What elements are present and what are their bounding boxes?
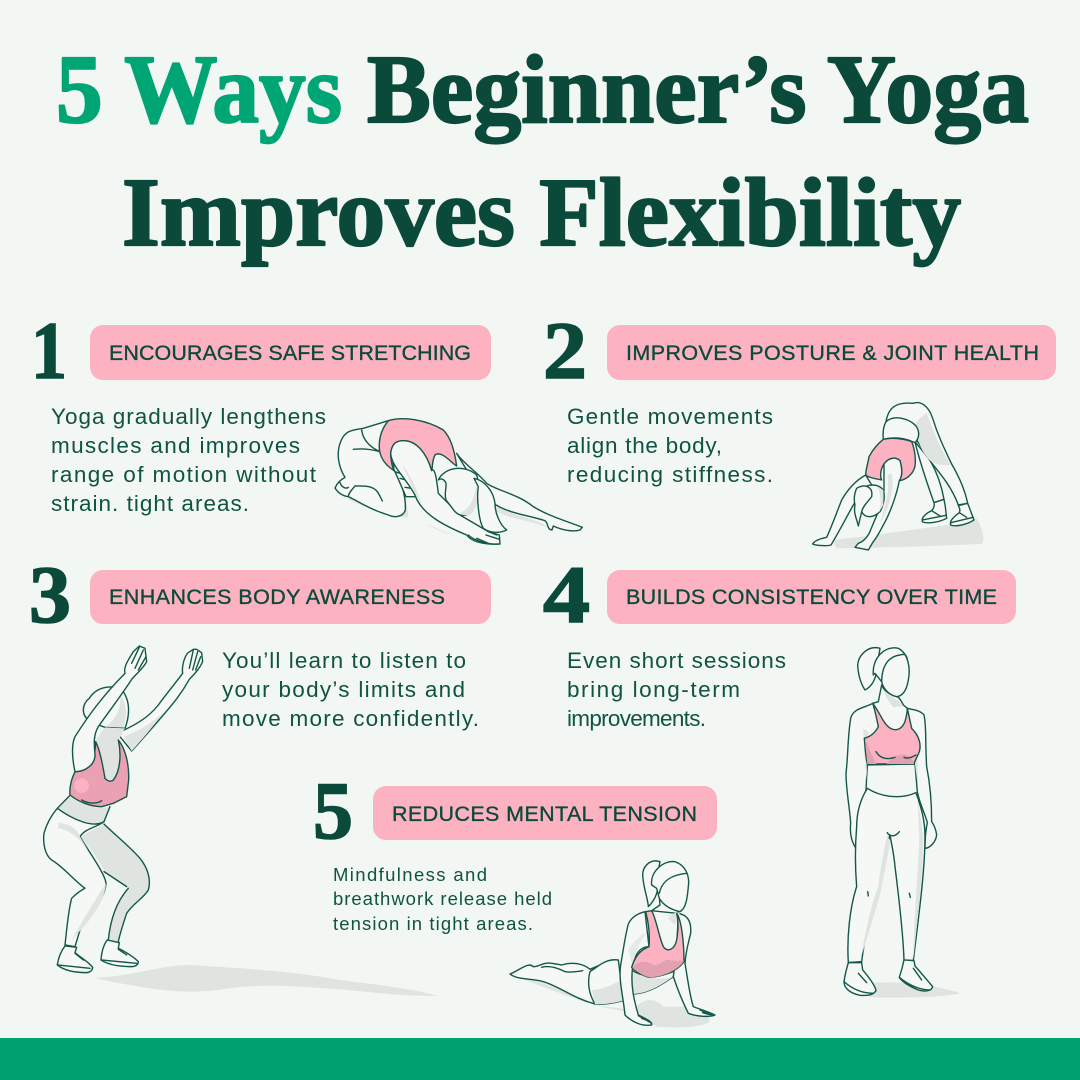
- footer bar: [0, 1038, 1080, 1080]
- text block 5: [333, 864, 552, 934]
- panel: 5 reduces mental tension: [313, 765, 717, 1028]
- text block 3: [222, 648, 479, 731]
- text block 5: tension in tight areas.: [333, 913, 533, 934]
- near arm: [855, 458, 902, 550]
- heading pill 5: [373, 786, 717, 840]
- heading pill 1: [90, 325, 491, 380]
- ponytail: [643, 861, 660, 907]
- text block 3: your body’s limits and: [222, 677, 465, 702]
- text block 3: move more confidently.: [222, 706, 479, 731]
- far arm: [117, 649, 203, 751]
- number 4: 4: [543, 549, 590, 640]
- title: Beginner’s Yoga: [367, 36, 1029, 144]
- hips: [589, 960, 633, 1004]
- text block 2: align the body,: [567, 433, 722, 458]
- head: [83, 687, 129, 728]
- torso and arms: [846, 685, 937, 854]
- title: 5 Ways: [56, 36, 342, 144]
- text block 4: bring long-term: [567, 677, 740, 702]
- waistband: [883, 418, 919, 443]
- hair: [854, 486, 872, 526]
- heading pill 3: ENHANCES BODY AWARENESS: [109, 585, 445, 609]
- number 1: 1: [31, 305, 67, 396]
- text block 2: [567, 404, 773, 487]
- pink top: [70, 740, 129, 807]
- text block 2: Gentle movements: [567, 404, 773, 429]
- belly: [629, 967, 682, 994]
- far leg: [80, 824, 149, 942]
- back: [96, 727, 125, 780]
- ground shadow: [95, 965, 437, 996]
- panel: 4 builds consistency over time: [543, 549, 1016, 998]
- ponytail: [858, 648, 880, 690]
- near arm: [72, 646, 147, 772]
- far arm: [813, 475, 872, 546]
- head: [873, 648, 909, 697]
- illustration: child's pose: [335, 419, 582, 544]
- text block 1: muscles and improves: [51, 433, 300, 458]
- text block 1: Yoga gradually lengthens: [51, 404, 326, 429]
- pink top: [866, 438, 915, 481]
- hips and legs: [335, 421, 405, 517]
- text block 1: [51, 404, 326, 516]
- title: Improves Flexibility: [122, 159, 961, 267]
- shoes: [922, 499, 947, 523]
- heading pill 2: [607, 325, 1056, 380]
- text block 4: [567, 648, 786, 731]
- head: [652, 862, 689, 912]
- pink top: [864, 703, 920, 764]
- text block 4: improvements.: [567, 706, 706, 731]
- far arm: [673, 913, 715, 1016]
- text block 1: strain. tight areas.: [51, 491, 249, 516]
- head: [860, 485, 884, 517]
- heading pill 3: [90, 570, 491, 624]
- illustration: downward dog: [813, 403, 983, 550]
- hair: [474, 478, 507, 532]
- heading pill 2: IMPROVES POSTURE & JOINT HEALTH: [626, 341, 1039, 365]
- shoes: [844, 963, 876, 995]
- heading pill 5: REDUCES MENTAL TENSION: [392, 802, 697, 826]
- title: [56, 36, 1029, 267]
- text block 1: range of motion without: [51, 462, 317, 487]
- text block 5: breathwork release held: [333, 888, 552, 909]
- pink top: [632, 911, 684, 977]
- pink top: [379, 419, 457, 471]
- legs: [510, 963, 600, 1004]
- illustration: standing mountain pose: [844, 648, 961, 998]
- near leg: [44, 808, 106, 947]
- number 5: 5: [313, 765, 353, 856]
- near arm: [391, 441, 500, 544]
- shoes: [57, 946, 93, 973]
- shin behind arm: [395, 472, 420, 497]
- torso and near arm: [620, 912, 652, 1025]
- near leg: [886, 403, 968, 505]
- head: [438, 468, 478, 515]
- panel: 3 enhances body awareness: [29, 549, 491, 996]
- neck: [652, 897, 682, 913]
- text block 3: You’ll learn to listen to: [222, 648, 466, 673]
- panel: 1 encourages safe stretching: [31, 305, 582, 544]
- panel: 2 improves posture and joint health: [543, 305, 1056, 550]
- far leg: [915, 442, 944, 503]
- text block 2: reducing stiffness.: [567, 462, 773, 487]
- leggings: [848, 788, 925, 963]
- text block 5: Mindfulness and: [333, 864, 487, 885]
- heading pill 4: [607, 570, 1016, 624]
- waist: [57, 796, 110, 824]
- number 3: 3: [29, 549, 71, 640]
- far arm: [457, 453, 582, 531]
- heading pill 4: BUILDS CONSISTENCY OVER TIME: [626, 585, 997, 609]
- illustration: cobra pose: [510, 861, 715, 1028]
- illustration: chair pose: [44, 646, 203, 973]
- number 2: 2: [543, 305, 587, 396]
- text block 4: Even short sessions: [567, 648, 786, 673]
- heading pill 1: ENCOURAGES SAFE STRETCHING: [109, 341, 471, 365]
